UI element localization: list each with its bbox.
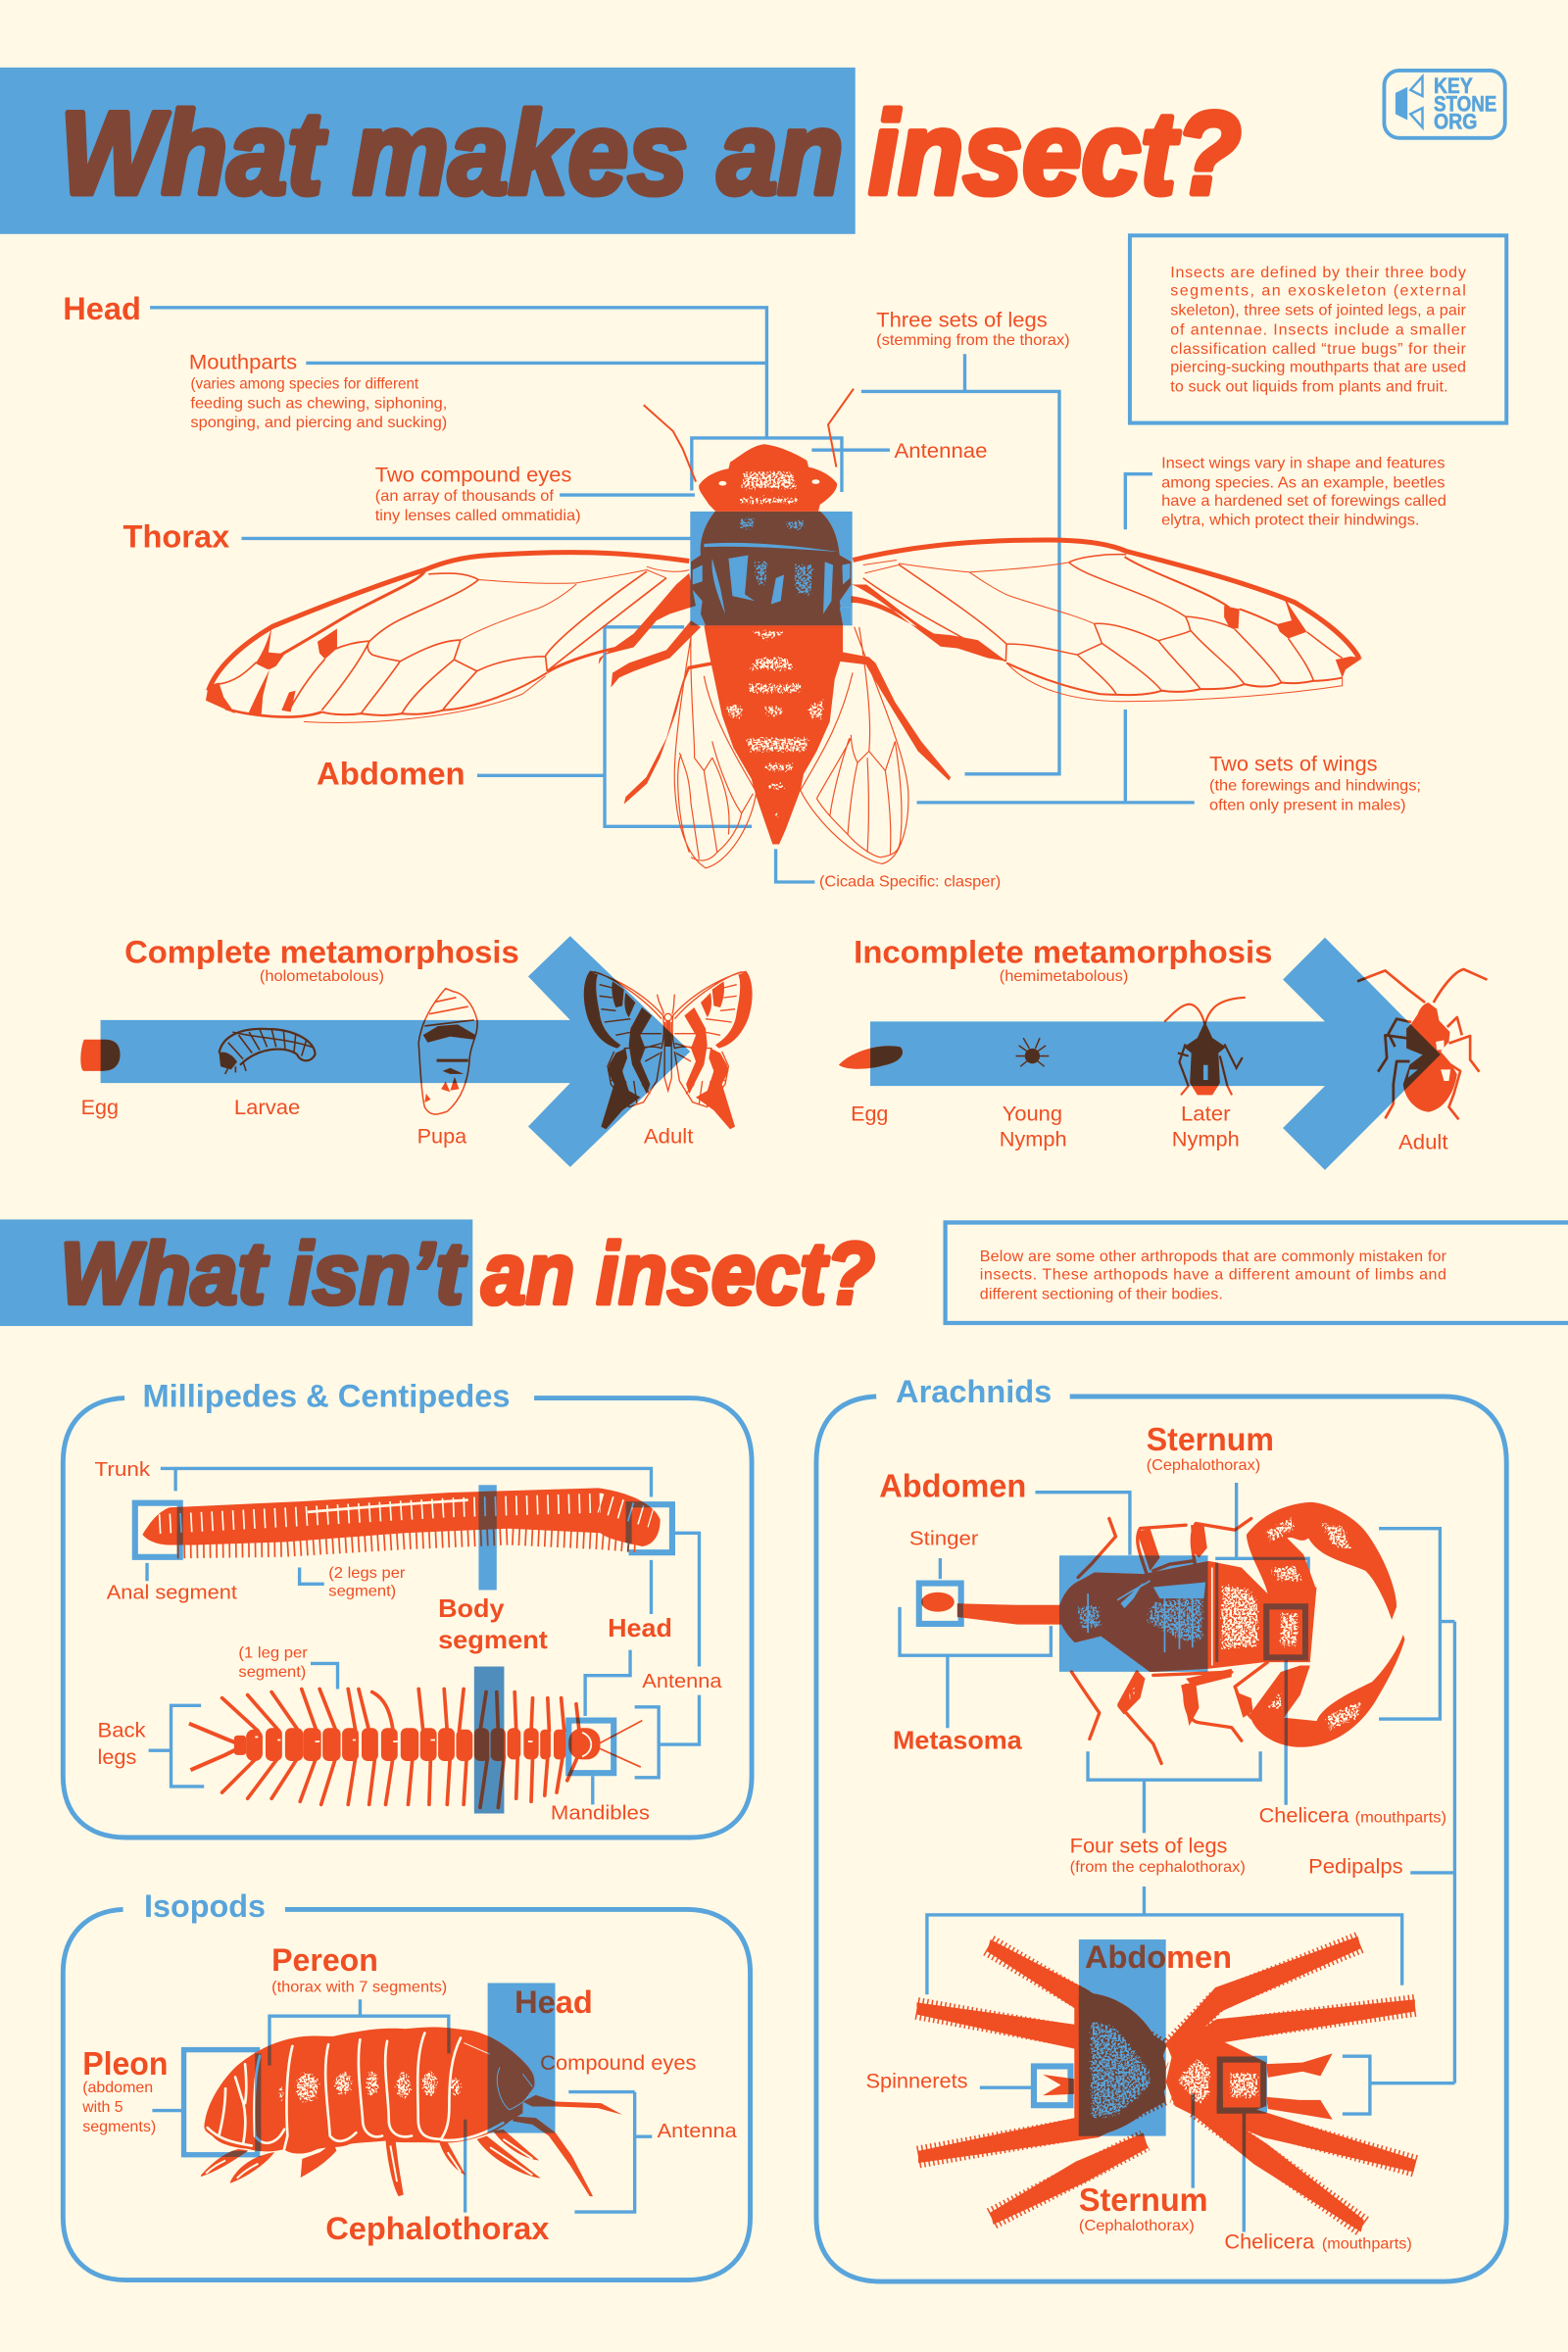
scorpion labels: Sternum [1147, 1422, 1274, 1458]
isopod labels: Pleon [82, 2046, 168, 2082]
spider leg hairs [917, 1942, 1415, 2226]
stage labels: Egg [851, 1102, 888, 1125]
isopod overlap [221, 2028, 555, 2176]
millipede labels: segment [438, 1625, 548, 1654]
body segment band, millipede [478, 1485, 497, 1590]
label: Three sets of legs: Three sets of legs [876, 309, 1048, 332]
intro text box [1130, 235, 1506, 423]
cicada leader lines [150, 308, 1195, 882]
speckled highlights on body [275, 2068, 464, 2105]
intro text box: of antennae. Insects include a smaller [1170, 320, 1467, 338]
header blue band [0, 68, 856, 234]
scorpion overlap [921, 1526, 1308, 1746]
second header blue band [0, 1219, 472, 1326]
label: Two sets of wings: (the forewings and hindwings; [1209, 777, 1421, 795]
centipede labels: Mandibles [551, 1802, 650, 1825]
millipede labels: segment) [328, 1583, 396, 1600]
note: insect wings: elytra, which protect their hindwings. [1161, 512, 1419, 529]
icon: egg [80, 1040, 120, 1071]
icon: adult bug [1357, 969, 1487, 1119]
legs and antennae [201, 2095, 622, 2196]
antennae [644, 389, 854, 482]
scorpion claws [1247, 1502, 1396, 1620]
icon: egg [839, 1046, 903, 1069]
panel title: Arachnids [896, 1374, 1052, 1409]
cicada illustration [206, 389, 1362, 868]
icon: butterfly [584, 971, 753, 1129]
legs and pedipalps labels: Pedipalps [1308, 1855, 1403, 1879]
label: Two sets of wings: often only present in males) [1209, 797, 1406, 814]
spider cephalothorax [1166, 2037, 1266, 2126]
label: Mouthparts: (varies among species for different [190, 374, 419, 392]
scorpion open blue gaps [1120, 1582, 1205, 1608]
heading: incomplete metamorphosis: (hemimetabolous) [1000, 967, 1128, 985]
heading: complete metamorphosis: (holometabolous) [260, 967, 384, 985]
tail and stinger [957, 1603, 1062, 1625]
hindwings [674, 627, 757, 868]
left forewing [206, 553, 696, 722]
scorpion illustration [921, 1502, 1404, 1763]
stage labels: Nymph [1000, 1127, 1067, 1151]
isopod illustration [201, 2027, 622, 2196]
anatomy boxes [135, 1503, 672, 1773]
centipede labels [98, 1643, 722, 1825]
intro text box: classification called “true bugs” for their [1170, 340, 1467, 358]
icon: larva [220, 1029, 316, 1074]
note: insect wings: Insect wings vary in shape and features [1161, 455, 1445, 472]
title part two: insect? [869, 88, 1241, 219]
panel title: Isopods [144, 1888, 266, 1924]
scorpion labels: Stinger [909, 1528, 978, 1550]
heading: complete metamorphosis: Complete metamorphosis [124, 935, 519, 970]
scorpion labels: (Cephalothorax) [1147, 1456, 1260, 1474]
isopod labels: Head [514, 1984, 593, 2020]
stage labels: Adult [644, 1124, 693, 1148]
label: Mouthparts [189, 351, 447, 431]
logo: Keystone org [1384, 71, 1505, 138]
scorpion labels: (mouthparts) [1355, 1809, 1446, 1827]
label: Mouthparts: sponging, and piercing and sucking) [190, 414, 447, 431]
header: What isn't an insect [0, 1219, 875, 1326]
cicada labels [63, 291, 1446, 891]
label: Mouthparts: Mouthparts [189, 351, 297, 374]
body [204, 2027, 534, 2154]
pleon box [184, 2050, 258, 2155]
other arthropods text box [946, 1222, 1568, 1323]
isopod labels: segments) [82, 2118, 156, 2135]
other arthropods text box: different sectioning of their bodies. [980, 1286, 1223, 1303]
second title part one: What isn’t [60, 1225, 466, 1322]
millipede labels: Body [438, 1593, 505, 1623]
other arthropods text box: insects. These arthopods have a different amount of limbs and [980, 1266, 1446, 1284]
icon: later nymph [1164, 998, 1246, 1095]
centipede labels: Antenna [642, 1670, 722, 1692]
spinnerets [1043, 2075, 1074, 2095]
other arthropods text box: Below are some other arthropods that are commonly mistaken for [980, 1248, 1447, 1265]
incomplete metamorphosis insects [839, 969, 1487, 1119]
speckled highlights [1088, 2018, 1260, 2121]
millipede labels: Trunk [94, 1458, 151, 1481]
label: Thorax: Thorax [123, 519, 229, 555]
centipede labels: Back [98, 1718, 146, 1741]
icon: pupa [418, 989, 477, 1114]
panel: isopods [63, 1888, 751, 2280]
label: Two compound eyes: tiny lenses called ommatidia) [375, 507, 581, 524]
tarantula labels: (mouthparts) [1322, 2234, 1412, 2252]
note: insect wings: among species. As an example, beetles [1161, 473, 1445, 491]
tarantula blue block [1079, 1939, 1166, 2136]
stage labels: Egg [81, 1096, 119, 1119]
centipede labels: (1 leg per [238, 1643, 309, 1661]
millipede overlap [142, 1488, 661, 1546]
isopod labels: Cephalothorax [325, 2211, 550, 2246]
metamorphosis labels [81, 935, 1448, 1153]
isopod labels: (abdomen [82, 2079, 153, 2096]
stage labels [81, 1096, 1448, 1153]
scorpion blue block [1059, 1555, 1208, 1672]
tarantula overlap [1068, 1985, 1266, 2158]
speckled highlights [722, 468, 826, 828]
leader lines [152, 1999, 652, 2213]
spider leg cores [917, 1936, 1416, 2232]
legs [611, 620, 951, 804]
panel frame [816, 1396, 1506, 2281]
incomplete metamorphosis overlap [870, 977, 1441, 1103]
right forewing [852, 540, 1362, 702]
title part one: What makes an [60, 88, 843, 219]
isopod labels: Antenna [658, 2120, 737, 2142]
isopod labels: with 5 [81, 2098, 123, 2116]
tarantula labels [865, 1939, 1412, 2253]
scorpion labels [879, 1422, 1446, 1828]
stage labels: Adult [1398, 1130, 1448, 1153]
abdomen [704, 625, 843, 844]
label: Two compound eyes: Two compound eyes [375, 463, 571, 486]
isopod labels: Compound eyes [540, 2051, 696, 2075]
eye highlights [718, 481, 726, 486]
note: insect wings [1161, 455, 1446, 529]
stage labels: Young [1003, 1102, 1062, 1125]
millipede labels [94, 1458, 672, 1654]
millipede labels: Anal segment [107, 1582, 237, 1604]
millipede labels: Head [608, 1613, 672, 1642]
centipede labels: legs [98, 1745, 136, 1769]
scorpion labels: Chelicera [1259, 1804, 1349, 1828]
complete metamorphosis arrow [101, 936, 690, 1167]
intro text box: segments, an exoskeleton (external [1170, 282, 1466, 300]
millipede labels: (2 legs per [328, 1564, 406, 1582]
logo: Keystone org: ORG [1434, 110, 1477, 134]
note: insect wings: have a hardened set of forewings called [1161, 492, 1446, 510]
leader lines [900, 1483, 1454, 2232]
label: Abdomen: Abdomen [317, 757, 466, 792]
legs and pedipalps labels: (from the cephalothorax) [1070, 1858, 1246, 1876]
speckled highlights [1075, 1514, 1365, 1734]
intro text box: Insects are defined by their three body [1170, 264, 1466, 281]
panel frame [63, 1909, 751, 2280]
thorax highlights [693, 543, 851, 624]
scorpion legs [1071, 1519, 1267, 1763]
anatomy boxes [919, 1584, 1305, 2110]
isopod labels: Head [514, 1984, 593, 2020]
panel frame [63, 1398, 752, 1838]
body segment band, centipede [474, 1667, 504, 1814]
label: Three sets of legs [876, 309, 1070, 349]
scorpion labels: Abdomen [879, 1469, 1026, 1505]
head blue block [488, 1983, 556, 2133]
heading: incomplete metamorphosis [854, 935, 1272, 985]
stage labels: Later [1181, 1102, 1231, 1125]
label: Two compound eyes: (an array of thousands of [375, 487, 555, 505]
stage labels: Pupa [417, 1124, 466, 1148]
second title part two: an insect? [481, 1225, 875, 1322]
stage labels: Larvae [234, 1096, 300, 1119]
isopod labels: (thorax with 7 segments) [271, 1979, 447, 1996]
panel title: Millipedes & Centipedes [142, 1379, 511, 1414]
isopod labels: Pereon [271, 1942, 378, 1978]
isopod labels: Compound eyes [540, 2051, 696, 2075]
scorpion body [1058, 1561, 1316, 1672]
tarantula illustration [917, 1936, 1416, 2232]
head [699, 444, 837, 512]
legs and pedipalps labels: Four sets of legs [1070, 1834, 1227, 1857]
complete metamorphosis insects [80, 971, 753, 1129]
logo: Keystone org: STONE [1434, 91, 1496, 116]
panel: arachnids [816, 1374, 1506, 2281]
icon: young nymph [1016, 1038, 1049, 1066]
intro text box: skeleton), three sets of jointed legs, a pair [1170, 301, 1467, 318]
label: Two sets of wings: Two sets of wings [1209, 753, 1378, 776]
cicada thorax overlap [690, 512, 853, 625]
label: Two compound eyes [375, 463, 581, 524]
label: clasper: (Cicada Specific: clasper) [819, 873, 1001, 891]
label: Antennae: Antennae [895, 439, 987, 463]
complete metamorphosis overlap [100, 970, 686, 1129]
intro text box: to suck out liquids from plants and fruit. [1170, 377, 1448, 395]
tarantula labels: Abdomen [1085, 1939, 1232, 1975]
tarantula labels: Sternum [1079, 2182, 1208, 2219]
legs and pedipalps labels [1070, 1834, 1403, 1879]
stage labels: Nymph [1172, 1127, 1240, 1151]
leader lines [147, 1468, 699, 1804]
spider abdomen [1074, 1993, 1166, 2137]
scorpion labels: Metasoma [893, 1726, 1022, 1755]
centipede illustration [189, 1689, 642, 1807]
centipede overlap [474, 1690, 617, 1809]
logo: Keystone org: KEY [1434, 74, 1473, 98]
spider pedipalps [1266, 2053, 1333, 2120]
tarantula labels: (Cephalothorax) [1079, 2217, 1195, 2234]
centipede labels: segment) [238, 1663, 306, 1681]
tarantula labels: Chelicera [1224, 2230, 1314, 2253]
segment lines [208, 2034, 503, 2149]
header: What makes an insect [0, 68, 1241, 234]
tarantula labels: Spinnerets [865, 2070, 968, 2093]
blue thorax block [690, 512, 853, 625]
millipede illustration [142, 1488, 661, 1546]
isopod labels [81, 1942, 737, 2246]
tarantula labels: Abdomen [1085, 1939, 1232, 1975]
label: Three sets of legs: (stemming from the thorax) [876, 331, 1070, 349]
panel: millipedes and centipedes [63, 1379, 752, 1838]
intro text box: piercing-sucking mouthparts that are used [1170, 359, 1466, 376]
label: Two sets of wings [1209, 753, 1421, 814]
incomplete metamorphosis arrow [870, 938, 1441, 1170]
label: Head: Head [63, 291, 141, 326]
heading: complete metamorphosis [124, 935, 519, 985]
body, legs and hindwings [611, 389, 951, 868]
label: Mouthparts: feeding such as chewing, siphoning, [190, 394, 447, 412]
heading: incomplete metamorphosis: Incomplete metamorphosis [854, 935, 1272, 970]
thorax [691, 512, 851, 625]
